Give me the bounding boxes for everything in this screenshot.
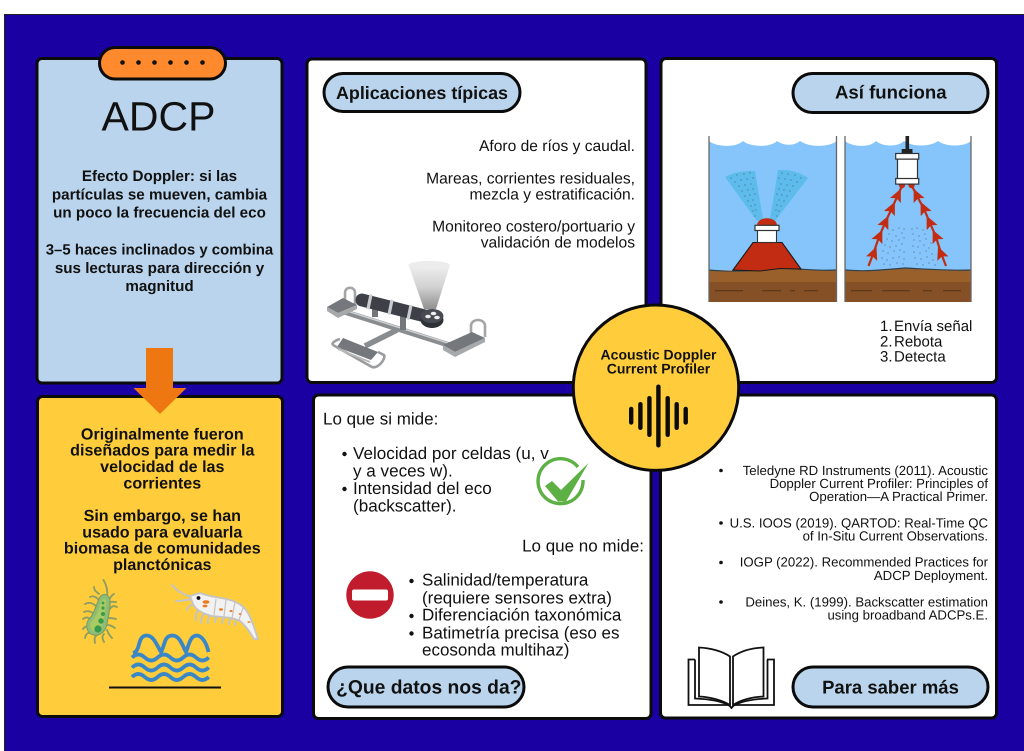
heading pill: Aplicaciones típicas: Aplicaciones típicas xyxy=(336,83,508,103)
list: references: Deines, K. (1999). Backscatter estimation xyxy=(745,594,988,609)
badge text: Current Profiler xyxy=(607,360,711,376)
text block: Doppler explanation xyxy=(46,168,274,295)
list: references: using broadband ADCPs.E. xyxy=(827,607,988,622)
list: three steps: Envía señal xyxy=(894,318,972,335)
text block: original use and biomass: velocidad de las xyxy=(100,458,225,476)
icon: sound wave xyxy=(629,384,688,448)
list: references: Doppler Current Profiler: Principles of xyxy=(770,476,988,491)
text block: Doppler explanation: partículas se mueven, cambia xyxy=(52,186,268,203)
text block: original use and biomass: diseñados para medir la xyxy=(70,442,255,460)
panel background: ADCP xyxy=(37,58,282,383)
heading pill: Para saber más: Para saber más xyxy=(822,676,959,697)
text block: original use and biomass: planctónicas xyxy=(113,556,212,574)
list: three steps: 3. xyxy=(880,348,893,366)
list: measured: y a veces w). xyxy=(353,462,453,481)
icon: white amphipod xyxy=(172,585,258,639)
panel background: references xyxy=(660,395,996,718)
text block: applications: Monitoreo costero/portuario y xyxy=(432,219,635,236)
heading pill: ¿Que datos nos da? xyxy=(328,667,524,707)
icon: green plankton cell xyxy=(83,580,117,643)
text block: applications: mezcla y estratificación. xyxy=(469,186,635,203)
list: not measured: Diferenciación taxonómica xyxy=(422,606,622,625)
list: not measured: (requiere sensores extra) xyxy=(422,588,612,607)
badge text: Acoustic Doppler xyxy=(601,346,717,362)
text block: Doppler explanation: 3–5 haces inclinados y combina xyxy=(46,242,274,258)
panel: what data it gives xyxy=(314,395,651,718)
list: three steps: 2. xyxy=(880,333,893,350)
icon: blue waves xyxy=(132,635,209,680)
icon: green check xyxy=(538,459,588,504)
tag: orange notebook clip xyxy=(100,48,226,79)
list: three steps: Detecta xyxy=(894,348,946,366)
back pad handle xyxy=(345,288,355,306)
icon: no entry sign xyxy=(346,571,394,619)
panel background: yellow xyxy=(38,396,282,716)
heading pill: Así funciona xyxy=(793,74,988,112)
text block: applications: Mareas, corrientes residuales, xyxy=(426,170,635,187)
title: ADCP xyxy=(102,94,215,140)
badge text xyxy=(601,346,717,376)
list: references: of In-Situ Current Observations. xyxy=(803,528,988,543)
heading pill: Así funciona: Así funciona xyxy=(835,82,947,102)
list: three steps: Rebota xyxy=(894,333,943,350)
list: measured: Velocidad por celdas (u, v xyxy=(353,444,549,463)
panel: ADCP intro xyxy=(37,48,282,383)
text block: original use and biomass: usado para evaluarla xyxy=(82,523,243,541)
list: references: Operation—A Practical Primer. xyxy=(809,489,988,504)
cylinder xyxy=(362,300,425,316)
panel: references xyxy=(660,395,996,718)
panel: how it works xyxy=(661,58,996,382)
panel: original use xyxy=(38,396,282,716)
heading pill: Aplicaciones típicas xyxy=(324,74,520,112)
list: references: IOGP (2022). Recommended Practices for xyxy=(740,555,989,570)
heading pill: Para saber más xyxy=(793,667,988,707)
text block: original use and biomass: Originalmente fueron xyxy=(81,425,244,443)
text block: Doppler explanation: Efecto Doppler: si las xyxy=(82,168,237,185)
list: not measured: ecosonda multihaz) xyxy=(422,641,569,660)
center badge: Acoustic Doppler Current Profiler xyxy=(573,305,739,470)
front pad and loop xyxy=(337,338,378,360)
panel background: data xyxy=(314,395,651,718)
heading: Lo que si mide: Lo que si mide: xyxy=(323,409,438,428)
icon: moored ADCP frame xyxy=(327,261,485,367)
text block: Doppler explanation: sus lecturas para dirección y xyxy=(55,260,265,277)
list: not measured: Batimetría precisa (eso es xyxy=(422,623,619,642)
list: measured: (backscatter). xyxy=(353,496,457,515)
text block: original use and biomass xyxy=(64,425,261,574)
list: three steps xyxy=(880,318,972,366)
list: measured xyxy=(342,444,549,515)
right pad xyxy=(443,332,485,352)
list: references xyxy=(719,463,989,622)
panel background: applications xyxy=(307,59,646,382)
list: references: ADCP Deployment. xyxy=(874,568,988,583)
panel background: how it works xyxy=(661,58,996,382)
list: not measured: Salinidad/temperatura xyxy=(422,571,589,590)
text block: original use and biomass: Sin embargo, se han xyxy=(84,507,241,525)
list: measured: Intensidad del eco xyxy=(353,479,492,498)
diagram: downward-looking ADCP with red echoes xyxy=(845,136,971,302)
text block: applications: Aforo de ríos y caudal. xyxy=(479,138,635,155)
heading: Lo que no mide: Lo que no mide: xyxy=(522,537,644,556)
list: references: Teledyne RD Instruments (2011). Acoustic xyxy=(743,463,988,478)
text block: applications xyxy=(426,138,635,252)
back pad xyxy=(327,298,357,313)
list: not measured xyxy=(409,571,622,660)
list: references: U.S. IOOS (2019). QARTOD: Real-Time QC xyxy=(730,515,988,530)
panel: applications xyxy=(307,59,646,382)
arrow: down to yellow panel xyxy=(134,348,186,414)
heading pill: ¿Que datos nos da?: ¿Que datos nos da? xyxy=(336,677,521,698)
icon: open book xyxy=(688,648,774,708)
decorative baseline under waves xyxy=(109,686,221,688)
right pad handle xyxy=(471,320,485,337)
list: three steps: 1. xyxy=(880,318,893,335)
text block: original use and biomass: corrientes xyxy=(123,474,201,492)
text block: Doppler explanation: un poco la frecuencia del eco xyxy=(53,205,266,222)
diagram: upward-looking ADCP on seabed xyxy=(709,136,836,302)
text block: original use and biomass: biomasa de comunidades xyxy=(64,540,261,558)
frame bars xyxy=(345,312,452,346)
text block: Doppler explanation: magnitud xyxy=(125,278,194,295)
text block: applications: validación de modelos xyxy=(481,235,635,252)
